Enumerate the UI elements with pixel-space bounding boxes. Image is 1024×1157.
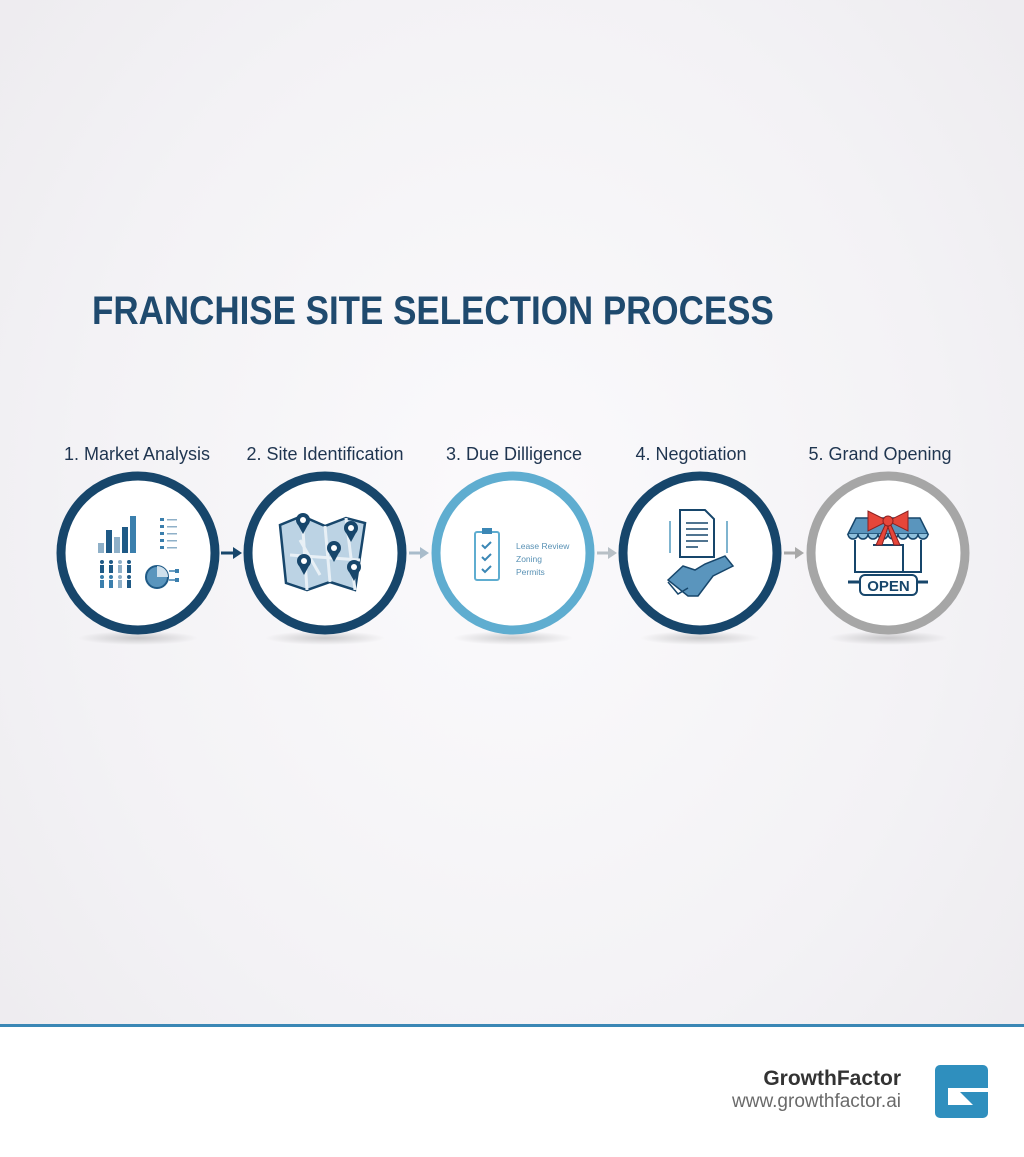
step labels: 2. Site Identification (246, 444, 404, 464)
step labels: 5. Grand Opening (808, 444, 952, 464)
circle 5: grand opening store (811, 476, 965, 630)
step labels: 1. Market Analysis (64, 444, 210, 464)
circle 3: due diligence checklist: Permits (516, 567, 545, 577)
process diagram (56, 444, 970, 644)
circle 5: grand opening store: OPEN (867, 578, 910, 595)
circle 2: site identification map (248, 476, 402, 630)
circle 3: due diligence checklist: Lease Review (516, 541, 570, 551)
step labels (64, 444, 952, 464)
brand text: GrowthFactor (763, 1067, 901, 1090)
circle 1: market analysis (61, 476, 215, 630)
circle 3: due diligence checklist: Zoning (516, 554, 542, 564)
footer (0, 1024, 1024, 1157)
arrows (221, 547, 242, 559)
step labels: 4. Negotiation (635, 444, 747, 464)
brand text (732, 1067, 901, 1112)
title: FRANCHISE SITE SELECTION PROCESS (92, 289, 774, 333)
brand text: www.growthfactor.ai (732, 1091, 901, 1112)
shadows (78, 631, 948, 645)
circle 3: due diligence checklist (436, 476, 590, 630)
circle 4: negotiation handshake (623, 476, 777, 630)
logo (935, 1065, 988, 1118)
step labels: 3. Due Dilligence (446, 444, 582, 464)
